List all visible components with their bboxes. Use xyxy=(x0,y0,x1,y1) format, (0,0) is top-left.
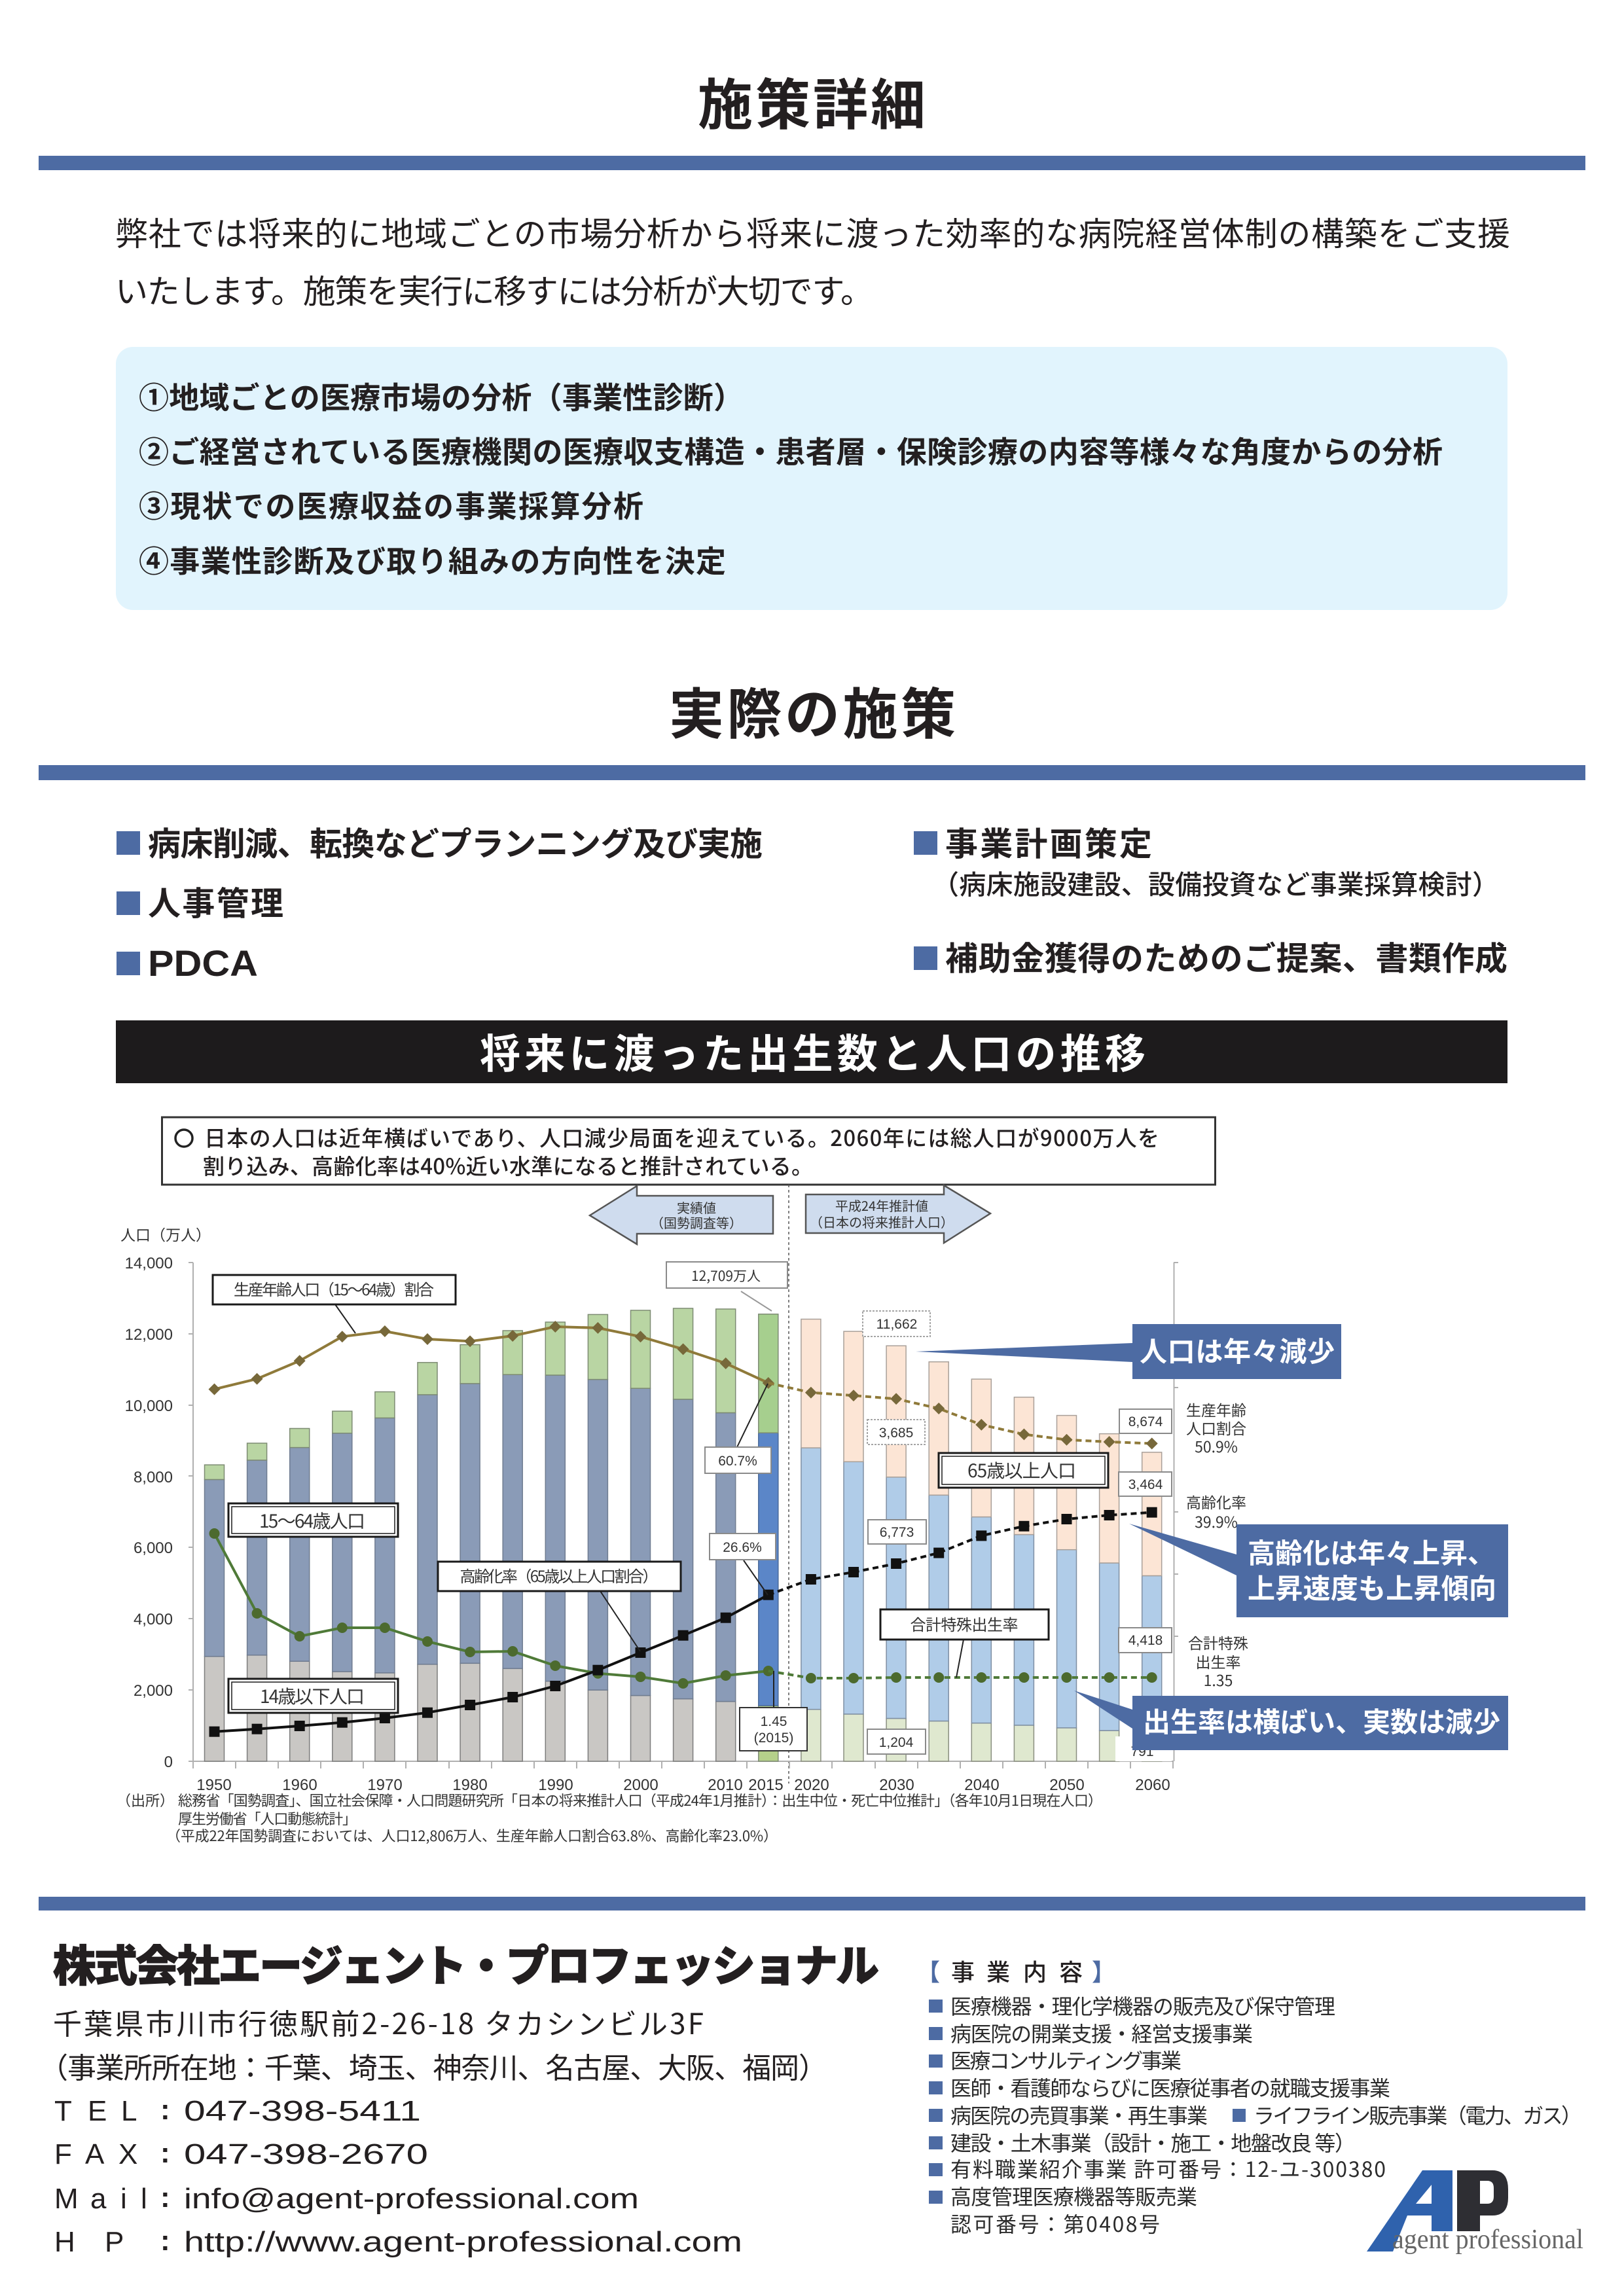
divider: actual vs projected xyxy=(788,1185,789,1784)
value labels: 3,685 xyxy=(879,1426,913,1441)
website: http://www.agent-professional.com xyxy=(184,2226,742,2258)
stacked bars: projected xyxy=(801,1319,1162,1761)
x axis year labels: 2030 xyxy=(879,1776,914,1794)
business list: ライフライン販売事業（電力、ガス） xyxy=(1254,2100,1582,2130)
side label: fertility rate xyxy=(1188,1631,1248,1691)
header rule: section one xyxy=(39,156,1585,170)
business list: 病医院の開業支援・経営支援事業 xyxy=(950,2018,1253,2048)
label: 26.6% xyxy=(710,1534,776,1560)
side label: fertility rate: 1.35 xyxy=(1204,1668,1233,1691)
y axis labels: 4,000 xyxy=(134,1611,173,1628)
y axis labels: 0 xyxy=(164,1753,173,1771)
x axis year labels: 1970 xyxy=(367,1776,403,1794)
telephone: TEL xyxy=(54,2095,137,2127)
x axis year labels: 2020 xyxy=(794,1776,829,1794)
callout: aging: 高齢化は年々上昇、 xyxy=(1248,1532,1495,1571)
label: 60.7% xyxy=(705,1447,771,1473)
value labels: 8,674 xyxy=(1128,1414,1163,1429)
title: 実際の施策: 実際の施策 xyxy=(669,671,956,750)
step 4: ④事業性診断及び取り組みの方向性を決定 xyxy=(139,538,726,581)
arrow: projected values xyxy=(806,1185,990,1243)
business list: 認可番号：第0408号 xyxy=(950,2208,1160,2238)
footer rule xyxy=(39,1897,1585,1910)
label: under-14 population xyxy=(228,1679,398,1713)
callout: population decline xyxy=(916,1324,1341,1379)
callout: aging xyxy=(1129,1524,1508,1617)
side label: working-age ratio: 50.9% xyxy=(1195,1435,1238,1457)
business list: 医療コンサルティング事業 xyxy=(950,2045,1182,2075)
bullet list: right column: 補助金獲得のためのご提案、書類作成 xyxy=(945,933,1507,980)
stacked bar: 2015 xyxy=(759,1314,778,1761)
business list: 医師・看護師ならびに医療従事者の就職支援事業 xyxy=(950,2072,1390,2102)
x axis year labels: 2010 xyxy=(708,1776,743,1794)
stacked bars: actual xyxy=(204,1308,736,1761)
arrow: projected values: （日本の将来推計人口） xyxy=(810,1212,954,1231)
y axis labels: 2,000 xyxy=(134,1682,173,1700)
side label: working-age ratio: 人口割合 xyxy=(1186,1416,1246,1439)
bullet list: left column: PDCA xyxy=(148,942,258,984)
fax: FAX xyxy=(54,2138,137,2170)
company contact block: 千葉県市川市行徳駅前2-26-18 タカシンビル3F xyxy=(53,2001,704,2043)
chart summary box xyxy=(162,1117,1215,1185)
label: 12,709 xyxy=(666,1262,787,1288)
x axis year labels: 2015 xyxy=(748,1776,784,1794)
bullet list: left column: 人事管理 xyxy=(148,878,283,925)
axis unit label: 人口（万人） xyxy=(120,1223,211,1245)
label: 1.45 (2015): 1.45 xyxy=(761,1714,787,1729)
fax: 047-398-2670 xyxy=(184,2138,428,2170)
intro text block: 弊社では将来的に地域ごとの市場分析から将来に渡った効率的な病院経営体制の構築をご支援 xyxy=(115,208,1510,255)
mail: info@agent-professional.com xyxy=(184,2183,639,2215)
value labels: 1,204 xyxy=(879,1735,914,1750)
mail: : xyxy=(160,2181,170,2214)
value labels xyxy=(863,1311,1172,1761)
side label: aging rate: 39.9% xyxy=(1195,1510,1238,1532)
telephone: : xyxy=(160,2094,170,2126)
y axis labels: 6,000 xyxy=(134,1539,173,1557)
label: working-age ratio: 生産年齢人口（15～64歳）割合 xyxy=(234,1277,434,1300)
business list: 有料職業紹介事業 許可番号：12-ユ-300380 xyxy=(950,2153,1386,2183)
side label: aging rate: 高齢化率 xyxy=(1186,1490,1246,1513)
y axis labels: 8,000 xyxy=(134,1469,173,1486)
source notes xyxy=(117,1789,1102,1846)
website: : xyxy=(160,2225,170,2257)
chart banner xyxy=(116,1020,1507,1083)
x axis year labels: 2050 xyxy=(1049,1776,1085,1794)
chart banner: 将来に渡った出生数と人口の推移 xyxy=(480,1021,1146,1080)
side label: aging rate xyxy=(1186,1490,1246,1532)
value labels: 3,464 xyxy=(1128,1477,1163,1492)
line: working-age ratio xyxy=(215,1327,1152,1444)
side label: working-age ratio: 生産年齢 xyxy=(1186,1398,1246,1420)
bullet list: right column: 事業計画策定 xyxy=(945,818,1152,865)
source notes: 総務省「国勢調査」、国立社会保障・人口問題研究所「日本の将来推計人口（平成24年1月推計）：出生中位・死亡中位推計」（各年10月1日現在人口） xyxy=(178,1789,1102,1810)
x axis year labels: 2040 xyxy=(964,1776,1000,1794)
panel: analysis steps xyxy=(116,347,1507,610)
callout: population decline: 人口は年々減少 xyxy=(1140,1330,1335,1370)
company contact block: （事業所所在地：千葉、埼玉、神奈川、名古屋、大阪、福岡） xyxy=(39,2045,827,2087)
line: birth rate xyxy=(215,1534,1152,1683)
step 2: ②ご経営されている医療機関の医療収支構造・患者層・保険診療の内容等様々な角度からの分析 xyxy=(139,429,1443,472)
label: total fertility rate: 合計特殊出生率 xyxy=(910,1612,1019,1635)
x axis year labels: 1990 xyxy=(538,1776,573,1794)
arrow: projected values: 平成24年推計値 xyxy=(835,1196,928,1215)
label: 65+ population xyxy=(939,1453,1108,1488)
x axis year labels: 2000 xyxy=(623,1776,659,1794)
x axis year labels: 2060 xyxy=(1135,1776,1170,1794)
label: 1.45 (2015) xyxy=(740,1708,807,1751)
callout: aging: 上昇速度も上昇傾向 xyxy=(1248,1567,1496,1607)
y axis labels: 12,000 xyxy=(125,1326,173,1344)
business list: 病医院の売買事業・再生事業 xyxy=(950,2100,1208,2130)
heading: business contents: 【 xyxy=(916,1954,940,1988)
arrow: actual values: 実績値 xyxy=(677,1198,716,1217)
label: working-age ratio xyxy=(213,1275,456,1304)
telephone: 047-398-5411 xyxy=(184,2095,421,2127)
label: total fertility rate xyxy=(880,1609,1049,1640)
y axis labels: 14,000 xyxy=(125,1255,173,1272)
business list: 医療機器・理化学機器の販売及び保守管理 xyxy=(950,1990,1335,2020)
mail xyxy=(54,2181,639,2215)
business list: 高度管理医療機器等販売業 xyxy=(950,2181,1197,2211)
business list: 建設・土木事業（設計・施工・地盤改良 等） xyxy=(950,2127,1356,2157)
side label: working-age ratio xyxy=(1186,1398,1246,1457)
label: aging rate: 高齢化率（65歳以上人口割合） xyxy=(460,1564,659,1587)
chart summary box: 割り込み、高齢化率は40%近い水準になると推計されている。 xyxy=(203,1149,813,1181)
leader lines xyxy=(335,1304,964,1708)
heading: business contents xyxy=(916,1954,1115,1988)
bullet list: right column xyxy=(914,818,1507,980)
chart: population and rates xyxy=(120,1223,1508,1794)
label: 26.6%: 26.6% xyxy=(723,1540,762,1555)
header rule: section two xyxy=(39,765,1585,780)
label: 1.45 (2015): (2015) xyxy=(754,1731,793,1746)
arrow: actual values: （国勢調査等） xyxy=(651,1213,742,1232)
value labels: 791 xyxy=(1130,1744,1154,1759)
chart summary box: 日本の人口は近年横ばいであり、人口減少局面を迎えている。2060年には総人口が9000万人を xyxy=(204,1121,1159,1153)
label: 60.7%: 60.7% xyxy=(718,1454,757,1469)
label: 65+ population: 65歳以上人口 xyxy=(967,1457,1076,1483)
axes xyxy=(189,1263,1178,1768)
label: 15-64 population xyxy=(228,1503,398,1537)
y axis labels: 10,000 xyxy=(125,1397,173,1415)
business list xyxy=(929,1990,1582,2238)
value labels: 11,662 xyxy=(876,1317,917,1332)
x axis year labels xyxy=(196,1776,1170,1794)
logo: agent professional xyxy=(1367,2170,1583,2255)
step 3: ③現状での医療収益の事業採算分析 xyxy=(139,483,643,526)
bullet list: left column xyxy=(117,818,763,984)
fax xyxy=(54,2137,428,2170)
callout: birth rate xyxy=(1074,1691,1508,1750)
intro text block: いたします。施策を実行に移すには分析が大切です。 xyxy=(115,266,873,313)
value labels: 4,418 xyxy=(1128,1633,1163,1648)
label: under-14 population: 14歳以下人口 xyxy=(260,1683,365,1709)
label: 15-64 population: 15～64歳人口 xyxy=(259,1507,365,1534)
logo: agent professional: agent professional xyxy=(1392,2225,1583,2255)
website: HP xyxy=(54,2226,124,2258)
side label: fertility rate: 出生率 xyxy=(1195,1650,1241,1672)
x axis year labels: 1960 xyxy=(282,1776,317,1794)
company contact block xyxy=(39,2001,827,2258)
fax: : xyxy=(160,2137,170,2169)
website xyxy=(54,2225,742,2258)
title: 施策詳細: 施策詳細 xyxy=(698,62,926,141)
source notes: （出所） xyxy=(117,1789,174,1810)
side label: fertility rate: 合計特殊 xyxy=(1188,1631,1248,1653)
heading: business contents: 】 xyxy=(1092,1954,1115,1988)
source notes: （平成22年国勢調査においては、人口12,806万人、生産年齢人口割合63.8%、高齢化率23.0%） xyxy=(166,1825,778,1846)
heading: business contents: 事業内容 xyxy=(951,1954,1083,1988)
intro text block xyxy=(115,208,1510,313)
company name: 株式会社エージェント・プロフェッショナル xyxy=(53,1931,879,1994)
telephone xyxy=(54,2094,421,2127)
step 1: ①地域ごとの医療市場の分析（事業性診断） xyxy=(139,374,744,418)
value labels: 6,773 xyxy=(880,1525,914,1540)
bullet list: left column: 病床削減、転換などプランニング及び実施 xyxy=(148,818,763,865)
x axis year labels: 1980 xyxy=(452,1776,488,1794)
arrow: actual values xyxy=(590,1186,773,1244)
line: aging rate xyxy=(215,1513,1152,1732)
y axis labels xyxy=(125,1255,173,1771)
source notes: 厚生労働省「人口動態統計」 xyxy=(178,1808,357,1829)
label: aging rate xyxy=(438,1562,681,1591)
mail: Mail xyxy=(54,2183,147,2215)
label: 12,709: 12,709万人 xyxy=(691,1266,761,1285)
bullet list: right column: （病床施設建設、設備投資など事業採算検討） xyxy=(932,863,1499,902)
x axis year labels: 1950 xyxy=(196,1776,232,1794)
callout: birth rate: 出生率は横ばい、実数は減少 xyxy=(1143,1700,1500,1740)
